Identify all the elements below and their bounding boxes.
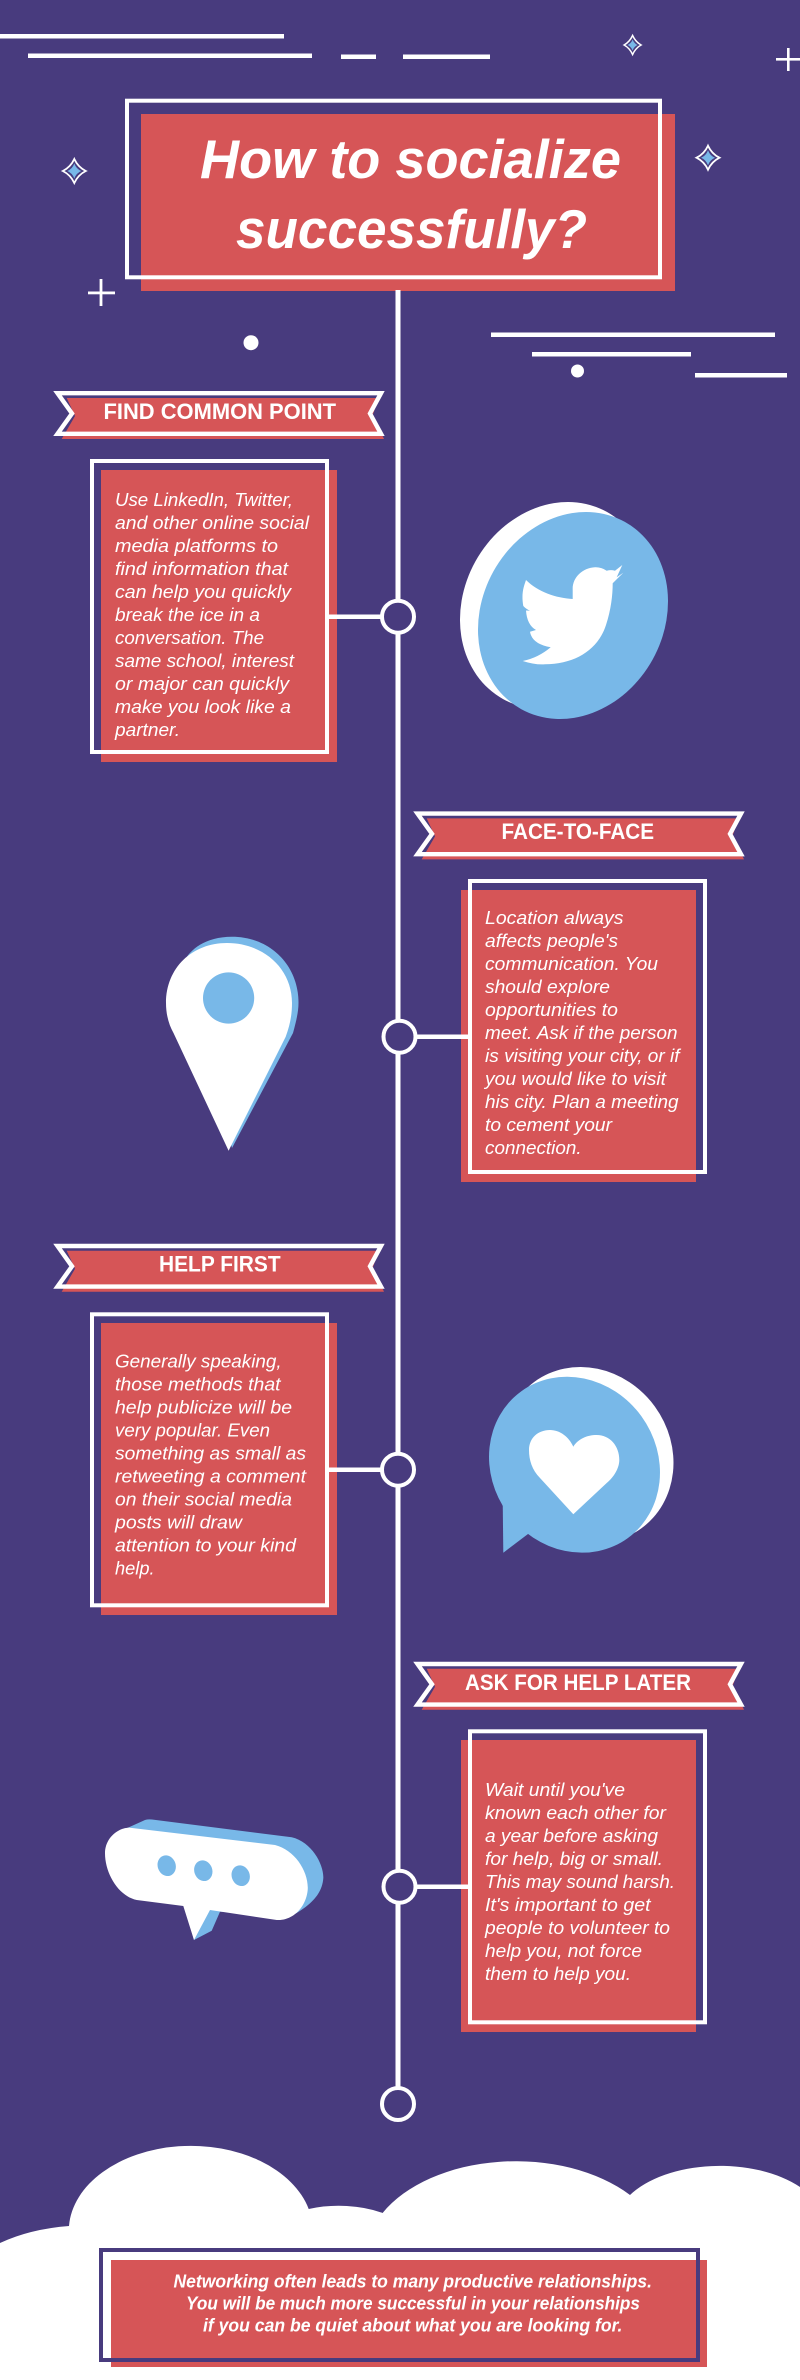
panel: find common point text: can help you quickly [115, 582, 292, 602]
panel: ask for help later text: people to volunteer to [484, 1918, 670, 1938]
panel: face-to-face text: his city. Plan a meeting [485, 1092, 679, 1112]
panel: help first text [92, 1314, 337, 1615]
panel: closing message [101, 2250, 707, 2367]
panel: find common point text: same school, interest [115, 651, 295, 671]
panel: help first text: those methods that [115, 1375, 282, 1395]
banner: ask for help later: ASK FOR HELP LATER [465, 1670, 691, 1695]
panel: help first text: retweeting a comment [115, 1467, 307, 1487]
icon: heart speech bubble [454, 1333, 708, 1587]
panel: find common point text: media platforms to [115, 536, 278, 556]
icon: chat bubble with dots [105, 1819, 323, 1940]
panel: ask for help later text: for help, big or small. [485, 1849, 663, 1869]
panel: face-to-face text: Location always [485, 908, 624, 928]
panel: ask for help later text: known each other for [485, 1803, 667, 1823]
icon: twitter coin [424, 468, 704, 753]
cloud footer [0, 2146, 800, 2380]
panel: find common point text: or major can quickly [115, 674, 290, 694]
panel: ask for help later text: It's important to get [485, 1895, 652, 1915]
panel: help first text: help publicize will be [115, 1398, 292, 1418]
panel: find common point text: partner. [114, 720, 180, 740]
panel: ask for help later text [461, 1731, 705, 2032]
panel: ask for help later text: Wait until you've [485, 1780, 625, 1800]
panel: help first text: something as small as [115, 1444, 306, 1464]
panel: face-to-face text: connection. [485, 1138, 582, 1158]
banner: face-to-face [418, 814, 744, 859]
panel: closing message: You will be much more successful in your relationships [186, 2293, 640, 2313]
panel: face-to-face text: communication. You [485, 954, 658, 974]
panel: ask for help later text: help you, not force [485, 1941, 642, 1961]
panel: find common point text: find information that [115, 559, 289, 579]
title: successfully? [236, 198, 587, 260]
panel: help first text: very popular. Even [115, 1421, 270, 1441]
panel: face-to-face text: meet. Ask if the person [485, 1023, 678, 1043]
panel: help first text: help. [115, 1559, 155, 1579]
panel: face-to-face text: you would like to visit [483, 1069, 667, 1089]
icon: plus left [88, 279, 115, 306]
panel: face-to-face text [461, 881, 705, 1182]
title panel [127, 101, 675, 291]
panel: find common point text [92, 461, 337, 762]
panel: find common point text: make you look like a [115, 697, 291, 717]
panel: find common point text: Use LinkedIn, Twitter, [115, 490, 293, 510]
panel: face-to-face text: to cement your [485, 1115, 613, 1135]
banner: face-to-face: FACE-TO-FACE [502, 819, 654, 844]
panel: help first text: attention to your kind [115, 1536, 297, 1556]
banner: help first [58, 1246, 384, 1292]
banner: help first: HELP FIRST [159, 1252, 281, 1277]
timeline [329, 290, 470, 2120]
panel: ask for help later text: This may sound harsh. [485, 1872, 675, 1892]
banner: find common point [58, 393, 384, 439]
panel: face-to-face text: should explore [485, 977, 610, 997]
panel: ask for help later text: them to help you. [485, 1964, 631, 1984]
panel: face-to-face text: opportunities to [485, 1000, 618, 1020]
panel: face-to-face text: is visiting your city, or if [485, 1046, 682, 1066]
panel: find common point text: and other online social [115, 513, 310, 533]
panel: find common point text: conversation. The [115, 628, 264, 648]
panel: ask for help later text: a year before asking [485, 1826, 658, 1846]
icon: plus top right [776, 48, 800, 71]
icon: sparkle top [624, 36, 641, 54]
panel: closing message: Networking often leads to many productive relationships. [174, 2271, 652, 2291]
panel: closing message: if you can be quiet about what you are looking for. [203, 2316, 622, 2336]
icon: map pin [166, 937, 298, 1151]
banner: ask for help later [418, 1664, 744, 1710]
icon: dot right [571, 364, 584, 378]
icon: sparkle right [696, 146, 720, 170]
banner: find common point: FIND COMMON POINT [104, 399, 337, 424]
panel: help first text: posts will draw [114, 1513, 243, 1533]
panel: find common point text: break the ice in a [115, 605, 260, 625]
icon: dot left [244, 335, 258, 350]
panel: face-to-face text: affects people's [485, 931, 618, 951]
title: How to socialize [200, 128, 621, 190]
panel: help first text: on their social media [115, 1490, 292, 1510]
panel: help first text: Generally speaking, [115, 1352, 282, 1372]
icon: sparkle left [63, 159, 86, 183]
